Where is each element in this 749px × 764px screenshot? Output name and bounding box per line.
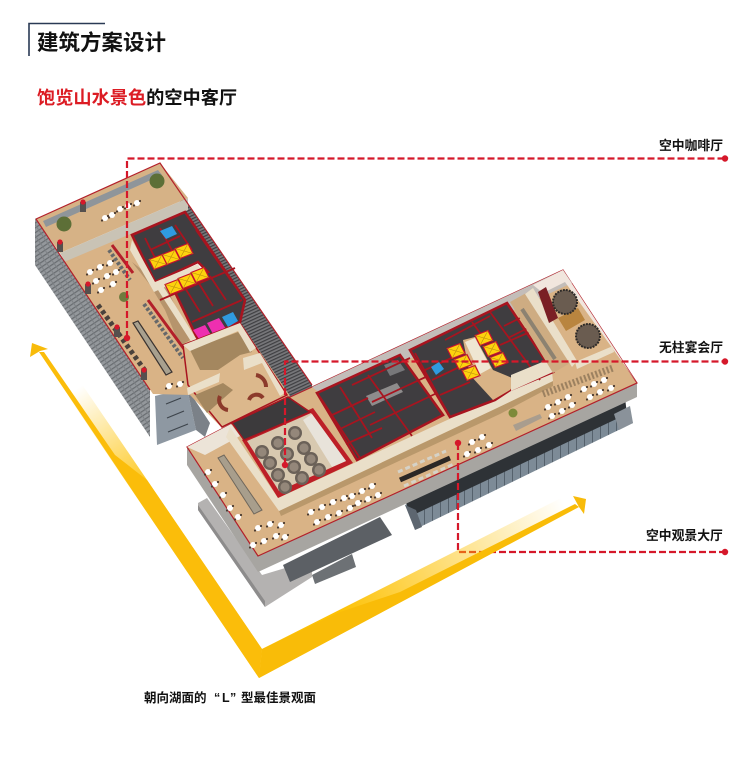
yellow L-shaped view arrow [30, 343, 586, 678]
label: 无柱宴会厅: 无柱宴会厅 [659, 340, 723, 355]
label: L-shaped best view: ” [230, 691, 236, 705]
label: L-shaped best view: 朝向湖面的 [144, 691, 207, 705]
left wing core rooms [130, 212, 245, 343]
left wing furniture [56, 174, 187, 390]
east end rooms with round tables [510, 270, 637, 383]
left wing lobby [183, 323, 287, 427]
right wing service core [317, 303, 553, 460]
title: 建筑方案设计 [37, 30, 166, 55]
lower glazed building [405, 398, 633, 530]
left wing east stair band [160, 163, 313, 407]
right wing floor [187, 270, 637, 556]
lower podium slabs [198, 498, 392, 607]
label: L-shaped best view: 型最佳景观面 [241, 690, 316, 705]
heading bracket [29, 24, 105, 56]
label: L-shaped best view: L [222, 691, 230, 705]
label: L-shaped best view: “ [214, 691, 220, 705]
south hall tables [204, 368, 615, 549]
callout leader: 无柱宴会厅 [282, 358, 728, 468]
callout leader: 空中观景大厅 [455, 440, 728, 555]
banquet hall [242, 408, 353, 498]
axonometric floor plan [35, 163, 637, 607]
callout leader: 空中咖啡厅 [124, 155, 728, 341]
subtitle: 饱览山水景色的空中客厅 [37, 87, 237, 108]
right wing slab [187, 383, 637, 572]
left wing floor [36, 163, 312, 428]
left wing end wall [155, 388, 210, 445]
right wing cream wall [226, 372, 553, 516]
stair link [232, 397, 310, 440]
label: 空中咖啡厅: 空中咖啡厅 [659, 138, 723, 153]
left wing glazed facade [35, 218, 150, 437]
label: 空中观景大厅: 空中观景大厅 [646, 528, 723, 543]
